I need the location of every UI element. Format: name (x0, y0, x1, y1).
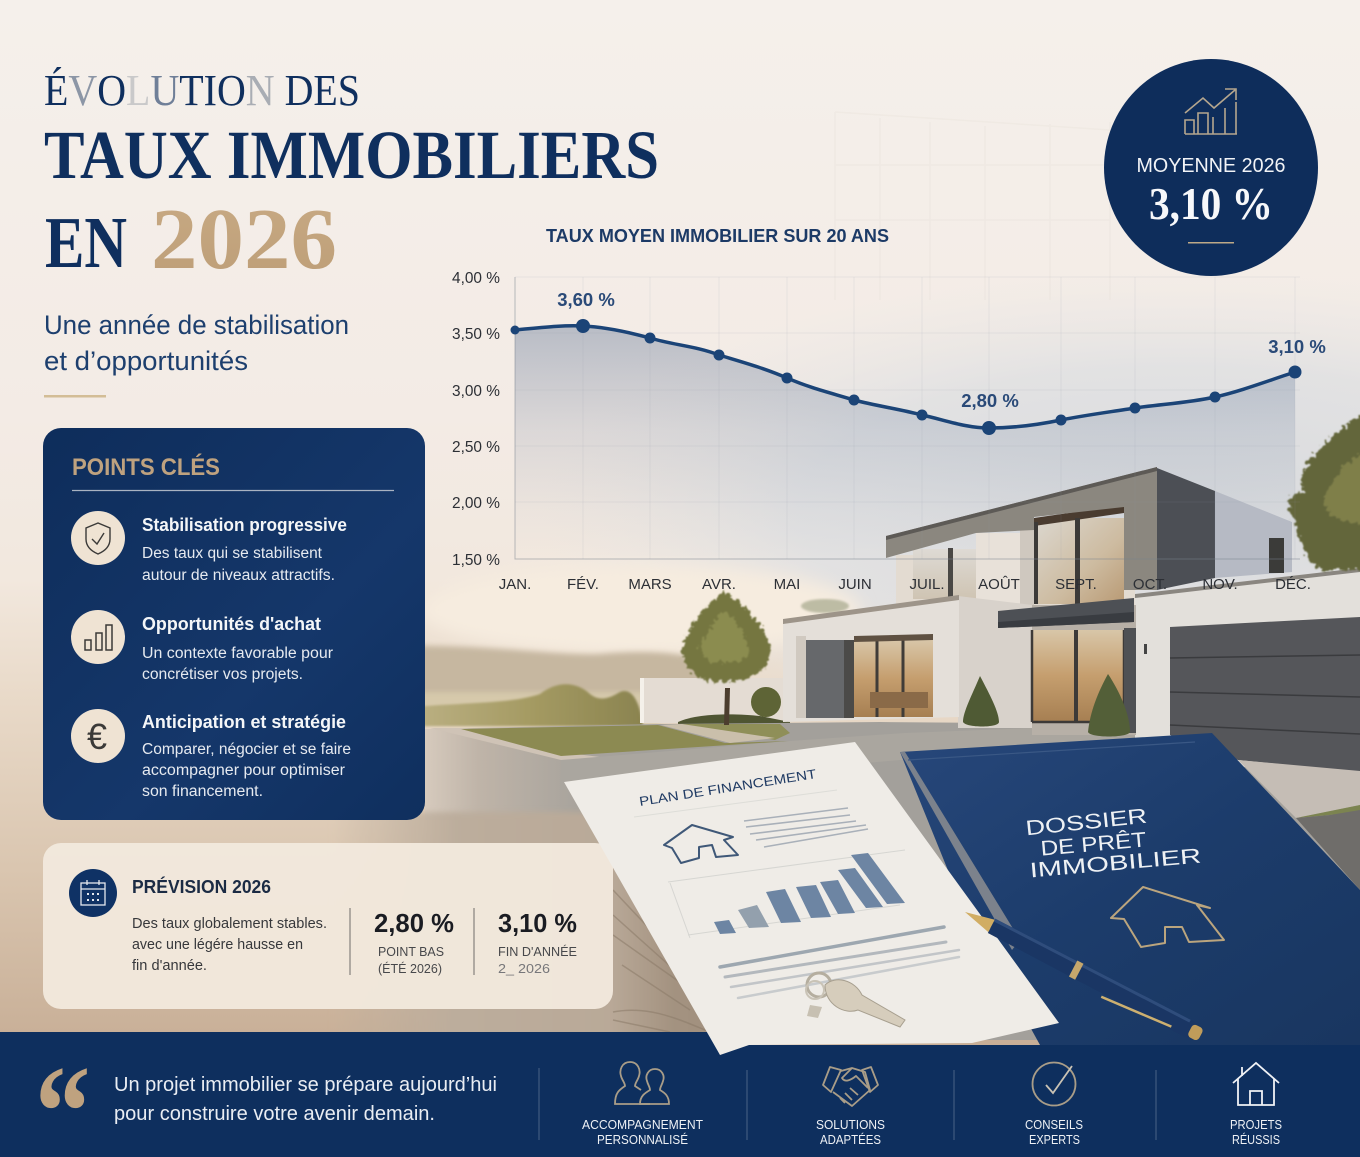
icon: pen (959, 904, 1205, 1046)
point: anticipation et stratégie: Anticipation et stratégie (142, 712, 346, 732)
icon: gold house (1111, 887, 1224, 947)
folder label: DE PRÊT (1040, 828, 1147, 861)
service: accompagnement personnalisé: ACCOMPAGNEMENT (582, 1117, 703, 1132)
chart: taux moyen immobilier (452, 225, 1326, 593)
x axis labels: DÉC. (1275, 576, 1311, 593)
badge: moyenne 2026 (1104, 59, 1318, 276)
point: stabilisation progressive: autour de niveaux attractifs. (142, 567, 335, 584)
icon: house outline (664, 825, 738, 863)
y axis labels: 3,00 % (452, 383, 500, 400)
service: solutions adaptées: ADAPTÉES (820, 1132, 881, 1147)
stat: fin d'année: 2_ 2026 (498, 961, 550, 976)
chart area fill (515, 326, 1295, 559)
stat: fin d'année (498, 908, 577, 976)
service: projets réussis: PROJETS (1230, 1117, 1282, 1132)
y axis labels: 1,50 % (452, 552, 500, 569)
title: ÉVOLUTION DES (44, 66, 360, 115)
x axis labels: JAN. (499, 576, 531, 593)
point: anticipation et stratégie (71, 709, 351, 800)
service: conseils experts: EXPERTS (1029, 1132, 1080, 1147)
value labels: 3,10 % (1268, 336, 1326, 357)
panel: prévision 2026 (43, 843, 613, 1009)
point: anticipation et stratégie: son financement. (142, 783, 263, 800)
panel heading: POINTS CLÉS (72, 453, 220, 481)
chart title: TAUX MOYEN IMMOBILIER SUR 20 ANS (546, 225, 889, 246)
landscape: fields, road and garden (330, 599, 1360, 1050)
x axis labels: OCT. (1133, 576, 1167, 593)
modern house (783, 467, 1360, 890)
stat: fin d'année: FIN D'ANNÉE (498, 944, 577, 959)
title: TAUX IMMOBILIERS (44, 117, 659, 193)
panel: prévision 2026: PRÉVISION 2026 (132, 876, 271, 897)
x axis labels: NOV. (1202, 576, 1238, 593)
badge: moyenne 2026: 3,10 % (1149, 178, 1273, 229)
footer band (0, 1032, 1360, 1157)
service: accompagnement personnalisé (582, 1062, 703, 1147)
icon: bars (85, 625, 112, 650)
service: solutions adaptées: SOLUTIONS (816, 1117, 885, 1132)
mini bar chart (668, 850, 905, 938)
service: solutions adaptées (816, 1067, 885, 1147)
data points (510, 319, 1302, 435)
point: opportunités d'achat (71, 610, 333, 683)
subtitle: et d’opportunités (44, 346, 248, 376)
point: stabilisation progressive: Des taux qui se stabilisent (142, 545, 323, 562)
quote: pour construire votre avenir demain. (114, 1103, 435, 1125)
data line (515, 326, 1295, 428)
stat: point bas: 2,80 % (374, 908, 454, 938)
stat: point bas: (ÉTÉ 2026) (378, 961, 442, 976)
point: anticipation et stratégie: Comparer, négocier et se faire (142, 741, 351, 758)
icon: keys (806, 973, 905, 1027)
y axis labels: 2,50 % (452, 439, 500, 456)
document: plan de financement (564, 742, 1059, 1055)
x axis labels: JUIN (838, 576, 872, 593)
y axis labels: 4,00 % (452, 270, 500, 287)
description: fin d'année. (132, 957, 207, 974)
folder: dossier de prêt immobilier (900, 733, 1360, 1045)
folder label: IMMOBILIER (1029, 845, 1202, 882)
point: opportunités d'achat: concrétiser vos projets. (142, 666, 303, 683)
icon: tree in garden (682, 592, 770, 725)
icon: rising chart (1185, 89, 1237, 134)
service: projets réussis: RÉUSSIS (1232, 1132, 1280, 1147)
icon: tree beside house (1288, 412, 1360, 570)
x axis labels: SEPT. (1055, 576, 1097, 593)
title (44, 66, 659, 287)
description: avec une légére hausse en (132, 936, 303, 953)
y axis labels: 2,00 % (452, 495, 500, 512)
y axis labels (452, 270, 500, 569)
value labels (557, 289, 1326, 411)
x axis labels: AVR. (702, 576, 736, 593)
stat: point bas: POINT BAS (378, 944, 444, 959)
title: 2026 (151, 190, 337, 287)
y axis labels: 3,50 % (452, 326, 500, 343)
folder label: DOSSIER (1024, 805, 1148, 840)
subtitle (44, 310, 349, 398)
value labels: 2,80 % (961, 390, 1019, 411)
point: anticipation et stratégie: accompagner pour optimiser (142, 762, 345, 779)
grid lines (515, 277, 1300, 559)
title: EN (45, 202, 127, 283)
quote: Un projet immobilier se prépare aujourd’hui (114, 1074, 497, 1096)
x axis labels: MARS (628, 576, 672, 593)
service: conseils experts: CONSEILS (1025, 1117, 1083, 1132)
folder label (1024, 805, 1202, 882)
subtitle: Une année de stabilisation (44, 310, 349, 340)
icon: calendar (69, 869, 117, 917)
icon: euro: € (87, 716, 107, 757)
stat: fin d'année: 3,10 % (498, 908, 577, 938)
stat: point bas (374, 908, 454, 976)
point: stabilisation progressive: Stabilisation progressive (142, 515, 347, 535)
description: Des taux globalement stables. (132, 915, 327, 932)
point: stabilisation progressive (71, 511, 347, 584)
service: accompagnement personnalisé: PERSONNALISÉ (597, 1132, 688, 1147)
panel: points clés (43, 428, 425, 820)
service: conseils experts (1025, 1062, 1083, 1147)
icon: shield (86, 523, 110, 554)
quote (114, 1074, 497, 1125)
x axis labels (499, 576, 1311, 593)
x axis labels: JUIL. (909, 576, 945, 593)
service: projets réussis (1230, 1063, 1282, 1147)
x axis labels: FÉV. (567, 576, 599, 593)
x axis labels: MAI (774, 576, 800, 593)
badge: moyenne 2026: MOYENNE 2026 (1136, 154, 1286, 177)
value labels: 3,60 % (557, 289, 615, 310)
x axis labels: AOÛT (978, 576, 1020, 593)
document title: PLAN DE FINANCEMENT (638, 766, 817, 809)
point: opportunités d'achat: Un contexte favorable pour (142, 645, 333, 662)
point: opportunités d'achat: Opportunités d'achat (142, 614, 321, 634)
description (132, 915, 327, 974)
